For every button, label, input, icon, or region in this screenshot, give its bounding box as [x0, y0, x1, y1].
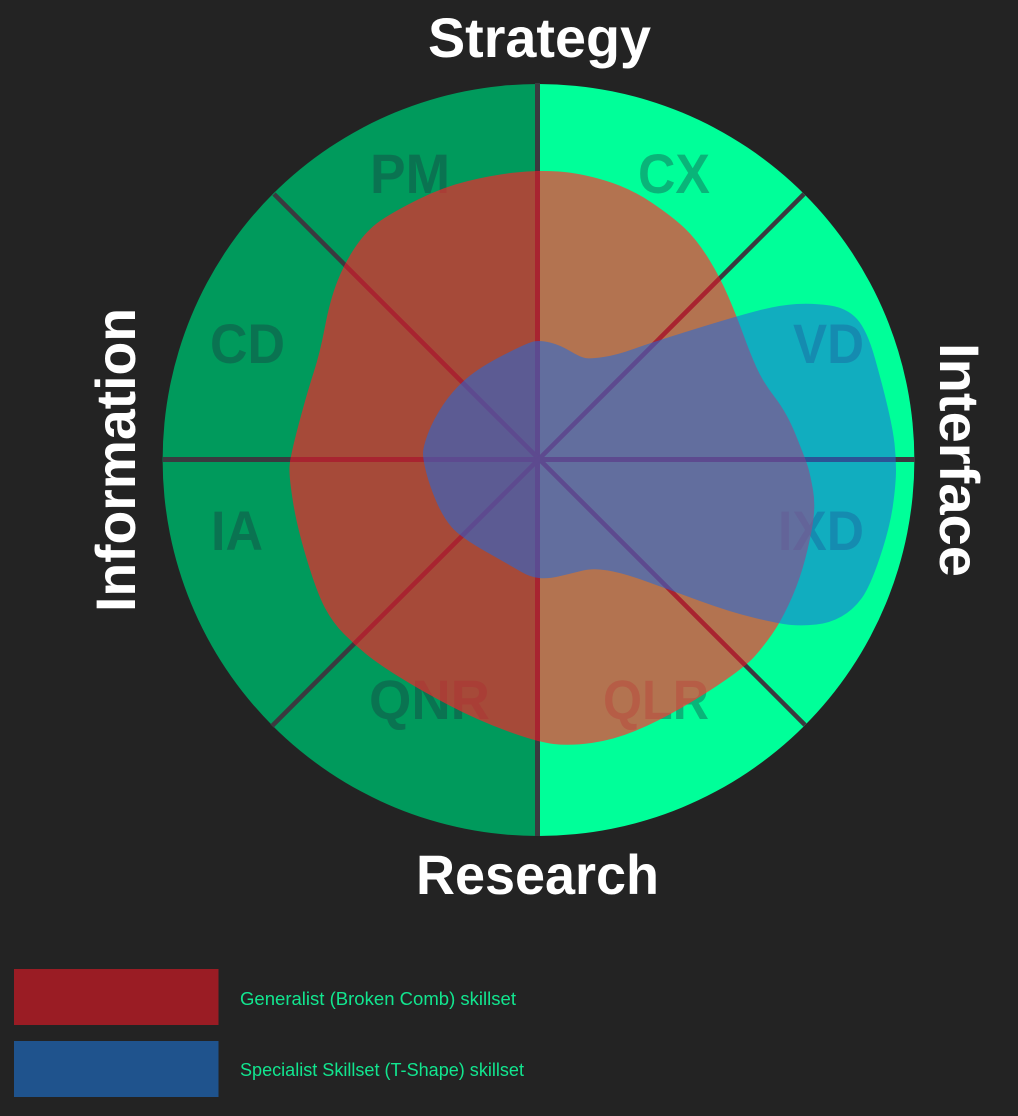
generalist skill shape (red)	[289, 171, 814, 745]
heading: Interface: Interface	[928, 343, 991, 577]
legend: specialist: Specialist Skillset (T-Shape) skillset	[240, 1059, 524, 1080]
wheel base: dark left half and bright right half	[163, 84, 914, 836]
sector labels: VD	[793, 312, 864, 375]
sector labels: CD	[210, 312, 285, 375]
sector labels: PM	[370, 142, 450, 205]
heading: Information: Information	[84, 308, 147, 612]
sector labels: IXD	[778, 499, 864, 562]
heading: Strategy: Strategy	[428, 6, 651, 69]
sector labels: QLR	[603, 668, 709, 731]
legend: specialist	[14, 1041, 524, 1097]
legend: generalist: Generalist (Broken Comb) skillset	[240, 988, 516, 1009]
legend: generalist	[14, 969, 516, 1025]
sector dividers	[163, 83, 915, 836]
sector labels: IA	[211, 499, 263, 562]
sector labels	[210, 142, 864, 731]
dividers tinted inside the red shape	[290, 171, 806, 742]
sector labels: QNR	[369, 668, 490, 731]
sector labels: CX	[638, 142, 710, 205]
heading: Research: Research	[416, 843, 659, 906]
specialist skill shape (blue)	[423, 304, 896, 625]
